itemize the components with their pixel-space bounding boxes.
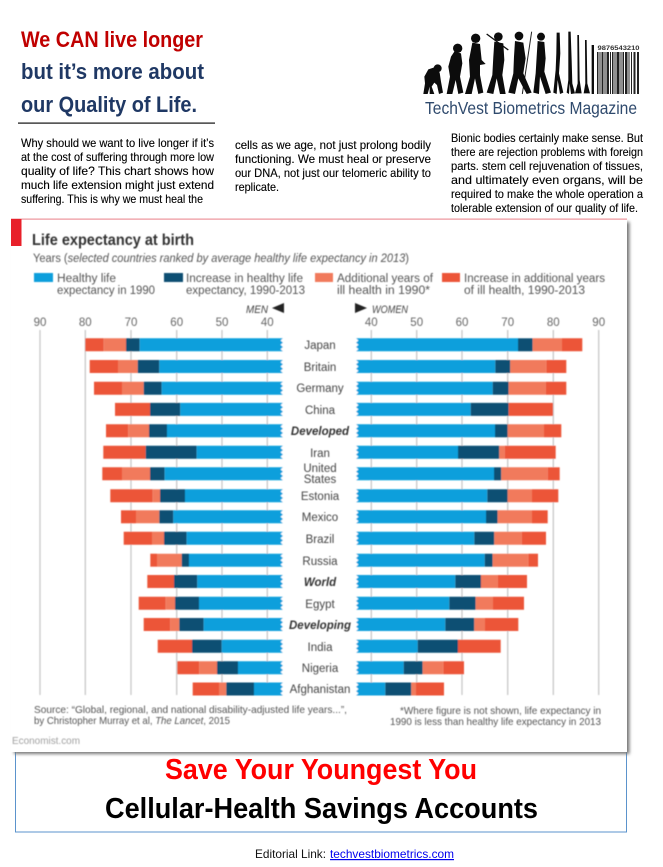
- page title: [21, 27, 204, 117]
- source note: Source: “Global, regional, and national disability-adjusted life years...”,: [34, 704, 347, 716]
- country labels: Developing: [289, 620, 351, 632]
- country labels: Afghanistan: [290, 684, 350, 696]
- axis labels: [34, 317, 605, 329]
- page title: We CAN live longer: [21, 27, 203, 52]
- panel: life expectancy chart: [11, 219, 630, 754]
- economist credit: Economist.com: [12, 735, 80, 747]
- country labels: China: [305, 405, 336, 417]
- country labels: Britain: [304, 362, 336, 374]
- legend: expectancy in 1990: [57, 285, 155, 297]
- country labels: Iran: [310, 448, 330, 460]
- women: Brazil: [354, 532, 546, 545]
- text column 3: tolerable extension of our quality of life.: [451, 202, 638, 215]
- men: Afghanistan: [193, 682, 285, 696]
- men: Egypt: [139, 597, 285, 610]
- country labels: Nigeria: [302, 663, 339, 675]
- footnote: [390, 705, 601, 728]
- editorial link: Editorial Link:: [255, 847, 326, 861]
- magazine name: TechVest Biometrics Magazine: [425, 98, 637, 118]
- women: India: [354, 640, 501, 653]
- legend: Increase in additional years: [464, 273, 605, 285]
- axis labels: 90: [592, 317, 605, 329]
- men axis heading: [246, 303, 284, 316]
- men: Japan: [85, 338, 285, 351]
- country labels: States: [304, 474, 337, 486]
- text column 2: replicate.: [235, 181, 279, 194]
- women bars: [354, 338, 582, 696]
- women axis heading: WOMEN: [372, 304, 408, 316]
- text column 1: Why should we want to live longer if it’s: [21, 137, 214, 150]
- axis labels: 70: [501, 317, 514, 329]
- women: Russia: [354, 554, 538, 567]
- legend: [34, 273, 605, 297]
- axis labels: 50: [410, 317, 423, 329]
- axis labels: 80: [79, 317, 92, 329]
- legend: Additional years of: [337, 273, 434, 285]
- axis labels: 70: [125, 317, 137, 329]
- men: Russia: [150, 554, 285, 567]
- men: Developed: [106, 424, 285, 437]
- country labels: Japan: [304, 340, 336, 352]
- women: Developing: [354, 618, 518, 631]
- page title: but it’s more about: [21, 59, 204, 84]
- chart heading: Life expectancy at birth: [32, 232, 194, 249]
- women: Mexico: [354, 510, 548, 523]
- text column 3: parts. stem cell rejuvenation of tissues,: [451, 160, 643, 173]
- men: Iran: [103, 446, 285, 459]
- women: Afghanistan: [354, 682, 444, 696]
- text column 2: [235, 139, 431, 194]
- call-to-action black line: Cellular-Health Savings Accounts: [105, 793, 538, 825]
- men: Britain: [90, 360, 285, 373]
- title rule: [18, 122, 215, 124]
- men: China: [115, 403, 285, 416]
- legend: Increase in healthy life: [186, 273, 303, 285]
- country labels: Brazil: [306, 534, 334, 546]
- men: India: [158, 640, 285, 653]
- footnote: *Where figure is not shown, life expectancy in: [400, 705, 601, 717]
- women: Nigeria: [354, 661, 464, 674]
- icon: evolution silhouettes: [423, 32, 594, 94]
- text column 2: cells as we age, not just prolong bodily: [235, 139, 431, 152]
- editorial link: techvestbiometrics.com: [330, 847, 454, 861]
- men axis heading: MEN: [246, 304, 268, 316]
- text column 2: functioning. We must heal or preserve: [235, 153, 431, 166]
- country labels: India: [308, 642, 333, 654]
- axis labels: 50: [216, 317, 228, 329]
- women: Developed: [354, 424, 561, 437]
- men: World: [147, 575, 285, 588]
- men: Brazil: [124, 532, 285, 545]
- axis labels: 80: [547, 317, 560, 329]
- men: Germany: [94, 382, 285, 395]
- women: China: [354, 403, 553, 416]
- text column 1: quality of life? This chart shows how: [21, 165, 215, 178]
- men bars: [85, 338, 285, 696]
- country labels: World: [304, 577, 337, 589]
- text column 3: there are rejection problems with foreign: [451, 146, 643, 159]
- axis labels: 40: [261, 317, 274, 329]
- source note: by Christopher Murray et al, The Lancet, 2015: [34, 715, 230, 727]
- country labels: [289, 340, 351, 696]
- axis labels: 40: [365, 317, 378, 329]
- text column 1: suffering. This is why we must heal the: [21, 193, 203, 206]
- text column 2: our DNA, not just our telomeric ability to: [235, 167, 431, 180]
- axis labels: 60: [170, 317, 183, 329]
- women axis heading: [355, 303, 408, 316]
- source note: [34, 704, 347, 727]
- footnote: 1990 is less than healthy life expectancy in 2013: [390, 716, 601, 728]
- text column 1: much life extension might just extend: [21, 179, 214, 192]
- men: Nigeria: [177, 661, 285, 674]
- text column 3: and ultimately even organs, will be: [451, 174, 643, 187]
- axis labels: 90: [34, 317, 46, 329]
- axis labels: 60: [456, 317, 468, 329]
- women: World: [354, 575, 527, 588]
- country labels: United: [303, 463, 337, 475]
- women: United States: [354, 467, 560, 480]
- women: Japan: [354, 338, 582, 351]
- legend: of ill health, 1990-2013: [464, 285, 585, 297]
- country labels: Germany: [296, 383, 344, 395]
- text column 1: [21, 137, 215, 206]
- women: Britain: [354, 360, 566, 373]
- country labels: Mexico: [302, 512, 338, 524]
- text column 3: required to make the whole operation a: [451, 188, 644, 201]
- icon: barcode: [597, 45, 640, 94]
- women: Germany: [354, 382, 566, 395]
- legend: ill health in 1990*: [337, 285, 431, 297]
- women: Iran: [354, 446, 556, 459]
- icon: barcode: 9876543210: [598, 45, 640, 52]
- red tab: [11, 219, 22, 246]
- men: United States: [102, 467, 285, 480]
- country labels: Estonia: [301, 491, 340, 503]
- call-to-action red line: Save Your Youngest You: [165, 754, 477, 786]
- country labels: Russia: [302, 556, 338, 568]
- women: Egypt: [354, 597, 524, 610]
- logo: evolution silhouettes and barcode: [423, 32, 640, 118]
- page title: our Quality of Life.: [21, 92, 197, 117]
- men: Developing: [144, 618, 285, 631]
- men: Mexico: [121, 510, 285, 523]
- women: Estonia: [354, 489, 558, 502]
- country labels: Developed: [291, 426, 350, 438]
- chart subtitle: Years (selected countries ranked by average healthy life expectancy in 2013): [33, 253, 409, 265]
- editorial link: [255, 847, 454, 861]
- men: Estonia: [110, 489, 285, 502]
- legend: expectancy, 1990-2013: [186, 285, 305, 297]
- bottom call-to-action box: [16, 740, 626, 832]
- legend: Healthy life: [57, 273, 116, 285]
- text column 1: at the cost of suffering through more low: [21, 151, 215, 164]
- text column 3: [451, 132, 644, 215]
- country labels: Egypt: [305, 599, 336, 611]
- text column 3: Bionic bodies certainly make sense. But: [451, 132, 644, 145]
